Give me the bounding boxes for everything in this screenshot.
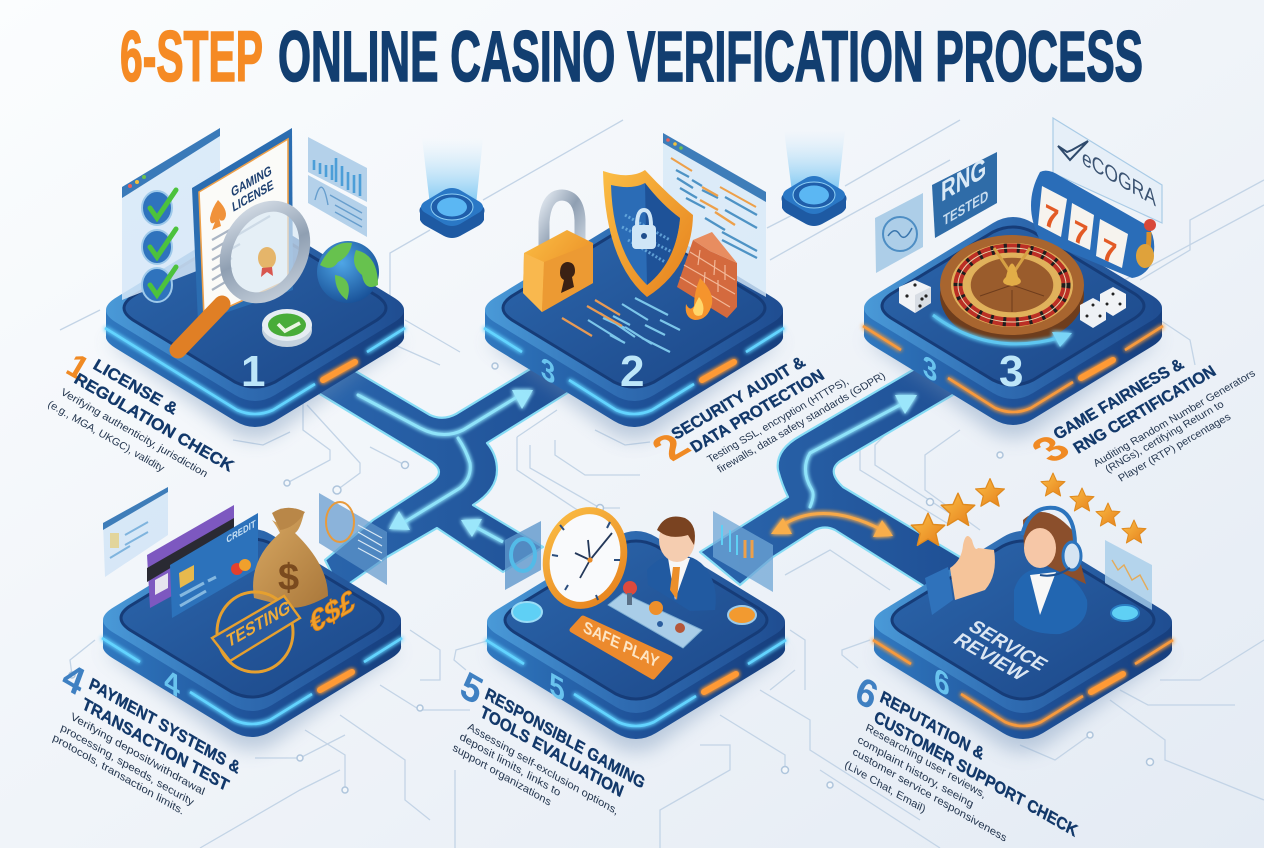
step number 1: 1 [241,347,265,396]
path line and arrow to step 3 [805,395,917,507]
right chart panel and pod [713,511,773,624]
step 6 platform [873,473,1173,752]
heading: REPUTATION & [878,687,987,764]
RNG tested badge: TESTED [943,187,988,230]
gaming license document: LICENSE [231,176,275,215]
description: deposit limits, links to [458,731,562,799]
roulette wheel [940,235,1084,345]
heading: LICENSE & [90,356,181,418]
number: 4 [57,654,90,705]
gaming license document [192,128,293,322]
description: (Live Chat, Email) [843,759,927,816]
heading: CUSTOMER SUPPORT CHECK [872,707,1080,841]
thumbs up [925,536,995,615]
data lines on platform [588,298,680,352]
number: 3 [1021,428,1081,470]
number: 6 [850,668,883,719]
rim lights [873,640,1173,726]
side number: 4 [164,661,180,706]
path line and arrow to step 4 [389,438,470,530]
person [647,516,716,611]
testing stamp [212,592,300,672]
step 4 label [51,654,243,818]
currency symbols: €$£ [308,583,357,641]
gaming license document: GAMING [230,162,272,200]
heading: RESPONSIBLE GAMING [483,684,648,793]
browser panel [103,487,168,577]
connector: left crossing [310,360,585,590]
step 4 platform [102,487,402,750]
data panel and pod [1105,540,1152,621]
slot machine: 7 [1071,214,1089,255]
eCOGRA panel: eCOGRA [1082,144,1156,212]
firewall bricks and flame [677,232,737,320]
description: firewalls, data safety standards (GDPR) [716,371,888,475]
description: Auditing Random Number Generators [1092,368,1258,469]
step 2 label [641,353,888,475]
description [843,722,1008,845]
number: 5 [455,663,488,714]
heading: RNG CERTIFICATION [1070,362,1219,457]
description: support organizations [451,742,553,809]
number: 1 [60,346,96,388]
slot machine: 7 [1042,198,1060,239]
RNG wave panel [875,193,923,273]
shield [603,170,693,297]
description: (e.g., MGA, UKGC), validity [45,399,167,475]
description: Assessing self-exclusion options, [466,721,620,818]
eCOGRA panel [1053,118,1162,223]
left glass panel and pod [505,521,542,622]
step 1 platform [105,128,405,440]
globe [317,241,379,303]
connector: right crossing [700,360,968,590]
service review label: SERVICE [963,617,1052,675]
step 1 label [45,346,237,480]
description [51,711,206,818]
description: Verifying authenticity, jurisdiction [58,387,209,480]
heading: TRANSACTION TEST [80,694,232,795]
chart panels [308,137,367,237]
step 3 label [1021,355,1258,484]
testing stamp: TESTING [226,596,291,652]
slot machine [1031,171,1156,278]
rim lights [105,328,405,414]
decorative pad: right [782,130,846,226]
rim lights [484,328,784,414]
money bag [253,508,328,608]
browser panel with checks [122,128,220,302]
side number: 3 [541,351,555,392]
heading: DATA PROTECTION [687,366,828,456]
step 5 platform [486,502,786,752]
service review label: REVIEW [948,630,1032,685]
description: Testing SSL, encryption (HTTPS), [706,376,851,465]
control panel [608,581,702,648]
RNG tested badge: RNG [941,151,986,208]
step 2 platform [484,133,784,440]
rim lights [863,326,1163,412]
description: processing, speeds, security [59,722,196,809]
support agent [1014,508,1087,634]
description: complaint history, seeing [856,734,975,811]
padlock [523,195,593,312]
code panel [663,133,766,297]
number: 2 [641,426,701,468]
safe play button: SAFE PLAY [583,617,661,673]
dice [899,280,1126,328]
heading: TOOLS EVALUATION [478,702,626,801]
title: 6-STEP [120,18,263,97]
path line and arrow to step 2 [358,390,533,435]
step 6 label [843,668,1080,845]
credit card: CREDIT [225,518,258,545]
money bag: $ [278,557,299,599]
review stars [911,473,1146,545]
description: customer service responsiveness [851,746,1008,845]
description: Verifying deposit/withdrawal [69,711,206,798]
step number 2: 2 [620,347,644,396]
arrow from step 5 [461,519,503,542]
description: protocols, transaction limits. [51,732,186,818]
RNG tested badge [932,151,997,238]
side number: 5 [549,665,565,709]
credit card [170,513,258,618]
side number: 3 [923,349,937,390]
purple card [147,505,234,608]
rim lights [486,640,786,726]
step 5 label [451,663,648,818]
slot machine: 7 [1100,232,1118,273]
rim lights [102,638,402,724]
magnifying glass [178,192,320,350]
orange double arrow [771,513,893,537]
step 3 platform [863,118,1163,438]
heading: REGULATION CHECK [71,370,237,475]
heading: SECURITY AUDIT & [668,353,809,443]
decorative pad: left [420,138,484,238]
right glass panel [319,493,387,585]
check button [262,309,312,347]
heading: PAYMENT SYSTEMS & [87,674,243,778]
step number 3: 3 [999,347,1023,396]
heading: GAME FAIRNESS & [1050,355,1187,443]
description: (RNGs), certifying Return to [1104,399,1226,475]
description: Player (RTP) percentages [1117,412,1233,484]
clock [536,502,634,614]
description: Researching user reviews, [864,722,987,801]
curved arrow [933,315,1072,347]
side number: 6 [934,660,950,704]
